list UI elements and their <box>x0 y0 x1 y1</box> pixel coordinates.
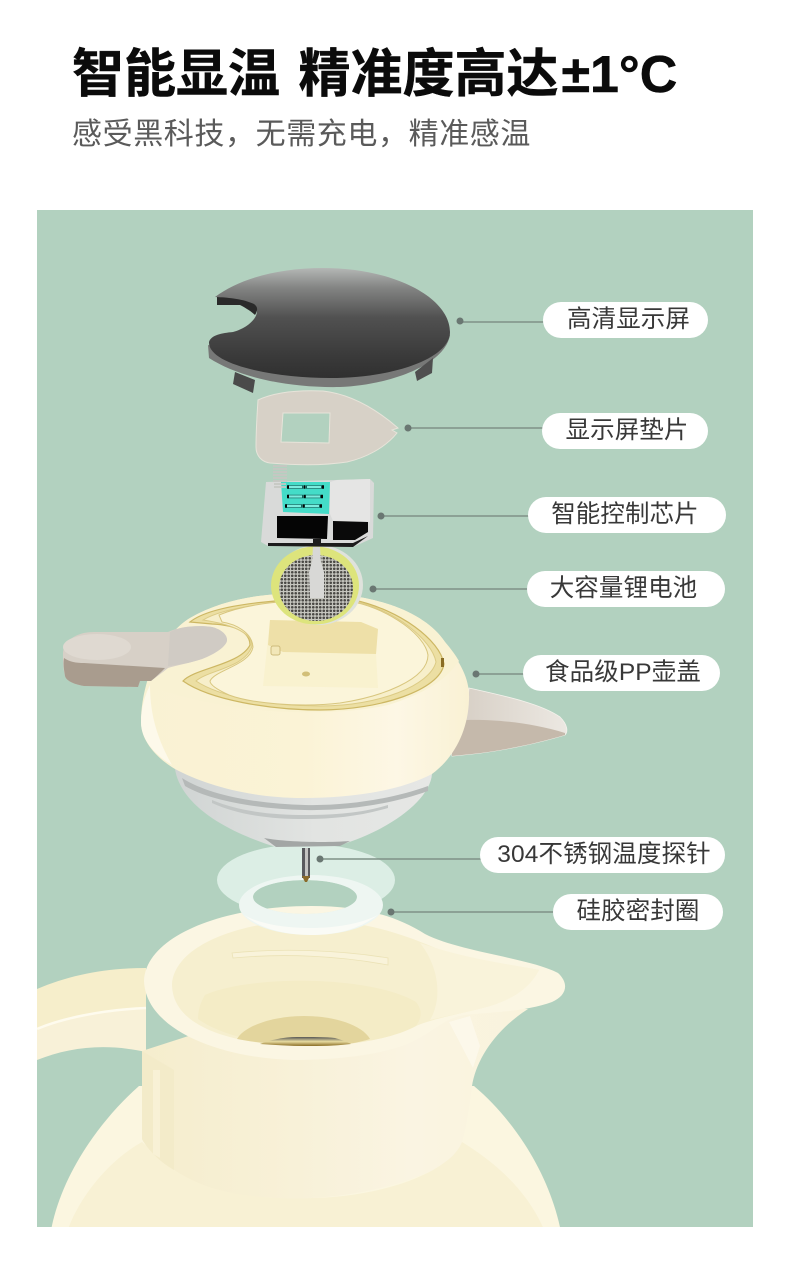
label: battery: 大容量锂电池 <box>550 575 697 602</box>
callout: seal line <box>388 908 554 916</box>
label: probe: 304不锈钢温度探针 <box>497 841 711 868</box>
lid top face <box>209 268 450 378</box>
label: gasket: 显示屏垫片 <box>566 417 688 444</box>
label: seal <box>553 894 723 930</box>
spring <box>273 466 287 487</box>
panel: green background <box>37 210 753 1227</box>
lid outer channel <box>183 599 444 710</box>
jug handle <box>37 968 146 1060</box>
lid left handle <box>63 626 227 687</box>
jug inner shelf <box>198 981 421 1046</box>
lid inner plate <box>210 600 428 705</box>
jug opening with metal liner <box>237 1016 370 1046</box>
callout: display screen line <box>456 318 543 324</box>
title: 智能显温 精准度高达±1°C <box>72 46 677 104</box>
lid middle ring <box>196 601 436 706</box>
silicone seal ring <box>217 844 395 935</box>
smart control chip <box>261 466 374 547</box>
label: probe <box>480 837 725 873</box>
label: display screen <box>543 302 708 338</box>
exploded product illustration <box>37 210 753 1227</box>
label: chip <box>528 497 726 533</box>
label: seal: 硅胶密封圈 <box>576 898 700 925</box>
lid notch wall <box>217 297 257 315</box>
black display screen lid <box>208 268 450 393</box>
label: battery <box>527 571 725 607</box>
label: lid: 食品级PP壶盖 <box>545 659 701 686</box>
digital display <box>281 482 330 514</box>
jug neck <box>142 1000 528 1199</box>
jug inner well <box>172 926 452 1043</box>
thermos jug <box>37 906 565 1244</box>
grey lid base <box>175 769 432 847</box>
callout: battery line <box>370 586 528 592</box>
lithium battery <box>271 545 363 625</box>
lid left edge highlight <box>141 685 172 765</box>
label: display screen: 高清显示屏 <box>567 306 690 333</box>
callout: probe line <box>316 856 481 862</box>
lid right spout <box>451 688 567 756</box>
label: chip: 智能控制芯片 <box>551 501 699 528</box>
food grade PP lid <box>63 593 567 798</box>
jug neck left panel <box>157 1157 174 1170</box>
label: gasket <box>542 413 708 449</box>
jug body lower shading <box>67 1142 545 1232</box>
lid dome <box>141 593 469 798</box>
callout: gasket line <box>404 424 543 432</box>
lid top shoulder <box>150 593 459 712</box>
jug body <box>52 1086 560 1227</box>
subtitle: 感受黑科技，无需充电，精准感温 <box>72 118 531 151</box>
jug spout channel <box>420 943 539 1020</box>
stainless temperature probe <box>302 848 310 882</box>
jug inner ridge <box>232 950 388 965</box>
callout: chip line <box>378 512 529 520</box>
label: lid <box>523 655 720 691</box>
lid socket <box>263 620 378 688</box>
jug rim <box>144 906 565 1060</box>
lid tabs <box>233 372 255 393</box>
callout: lid line <box>472 670 524 678</box>
lid side wall <box>208 332 450 387</box>
display screen gasket <box>256 391 398 465</box>
